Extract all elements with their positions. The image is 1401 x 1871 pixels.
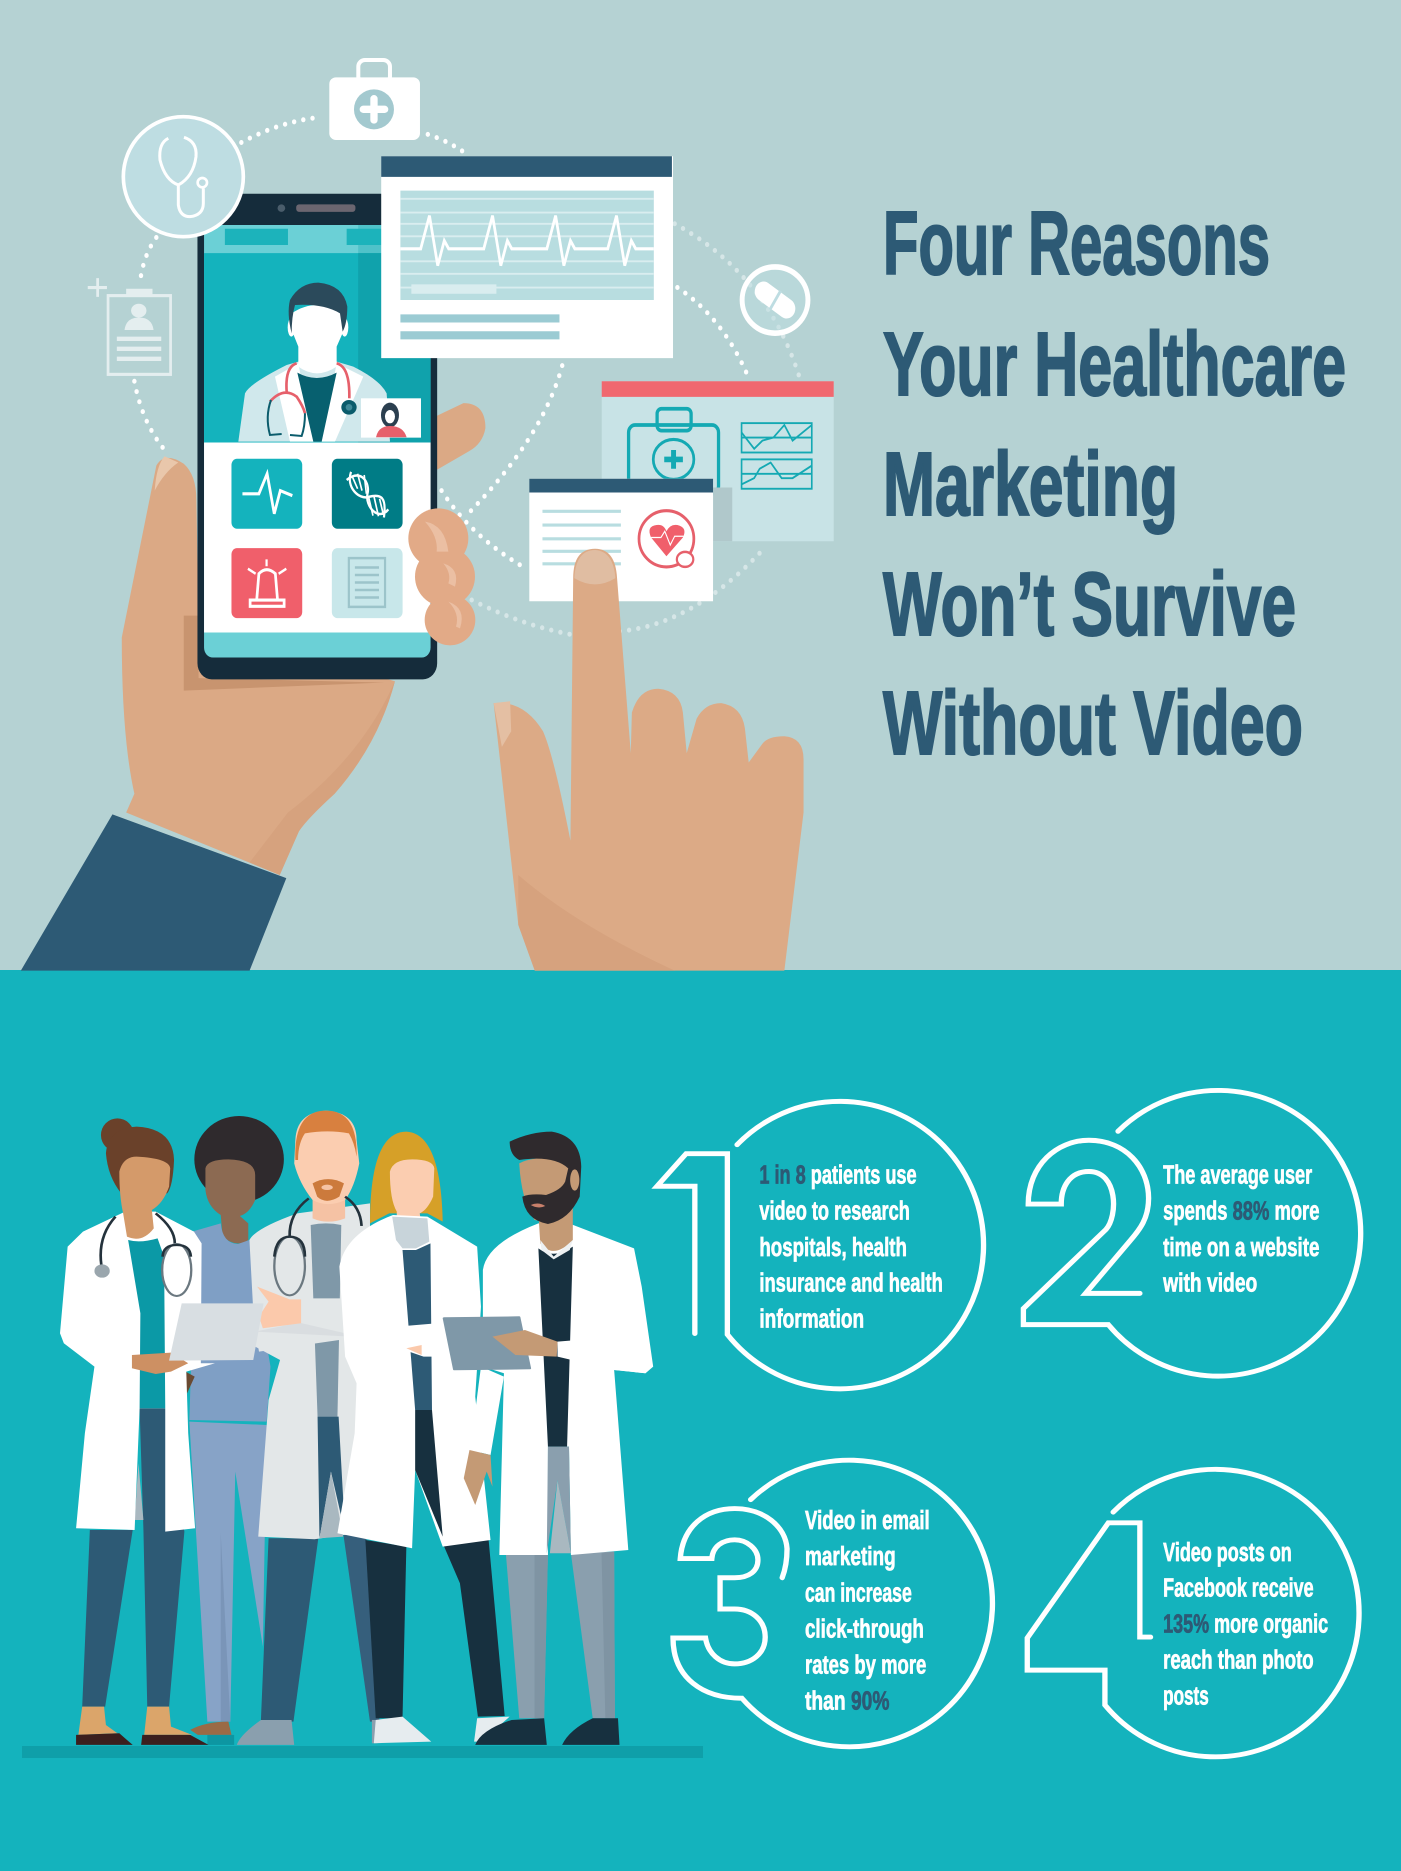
illustration: hands holding phone with medical icons <box>21 118 834 971</box>
stat 4 text: reach than photo <box>1163 1645 1314 1674</box>
stat 2 text: spends 88% more <box>1163 1197 1319 1225</box>
stat 1 text: video to research <box>759 1197 910 1225</box>
tile: document <box>332 548 403 618</box>
wrist shadow <box>250 681 395 875</box>
illustration: team of five doctors <box>60 1111 653 1745</box>
stat 3 text: than 90% <box>805 1686 889 1715</box>
doctor 2: blue scrubs <box>189 1116 284 1745</box>
tile: DNA <box>332 459 403 529</box>
stat 1: numeral and circle <box>657 1101 984 1389</box>
stat 4 text: Video posts on <box>1163 1538 1292 1567</box>
stat 3 text: Video in email <box>805 1506 930 1535</box>
title <box>883 194 1346 774</box>
stat 1 text: 1 in 8 patients use <box>759 1161 917 1189</box>
stat 3 text: click-through <box>805 1615 924 1643</box>
panel: heart card window <box>529 479 713 601</box>
stat 4 text <box>1163 1538 1328 1710</box>
stat 1 text <box>759 1161 943 1333</box>
stat 2 text: with video <box>1162 1269 1257 1297</box>
palm shadow <box>184 616 384 691</box>
panel: bottom teal background <box>0 970 1401 1871</box>
sleeve <box>21 814 286 971</box>
icon: clipboard with patient <box>88 278 171 374</box>
fingers over phone <box>408 508 475 645</box>
doctor 5: white coat, beard <box>464 1132 653 1745</box>
icon group: stethoscope and medical kit <box>123 60 420 237</box>
icon: pill badge <box>742 267 808 333</box>
panel: ECG monitor window <box>381 156 673 358</box>
panel: red header window <box>602 381 834 541</box>
crossed arm <box>255 1287 362 1352</box>
title: Marketing <box>883 435 1178 535</box>
icon: stethoscope badge <box>123 117 243 237</box>
stat 2 text: The average user <box>1163 1161 1312 1189</box>
stat 1 text: insurance and health <box>759 1269 943 1297</box>
stat 3 text: rates by more <box>805 1651 926 1679</box>
tile: alarm <box>231 548 302 618</box>
left hand back <box>122 458 395 875</box>
ground shadow <box>22 1746 703 1758</box>
hand and arm on tablet <box>492 1330 646 1373</box>
outlined stats group <box>657 1090 1361 1757</box>
stat 3 text: marketing <box>805 1542 896 1571</box>
stat 4 text: 135% more organic <box>1163 1610 1328 1638</box>
nail highlight <box>155 456 178 491</box>
stat 2 text: time on a website <box>1163 1233 1319 1262</box>
stat 4: numeral and circle <box>1027 1469 1359 1757</box>
doctor 1: white coat, bun <box>60 1118 215 1745</box>
stat 3 text <box>805 1506 930 1715</box>
doctor 4: blonde <box>337 1132 510 1743</box>
thumb behind phone <box>433 403 485 472</box>
phone <box>197 194 437 679</box>
stat 1 text: hospitals, health <box>759 1233 907 1262</box>
dotted connector arcs <box>134 118 800 634</box>
tablet <box>444 1317 530 1369</box>
stat 2: numeral and circle <box>1023 1090 1361 1376</box>
stat 4 text: Facebook receive <box>1163 1574 1314 1602</box>
doctor on phone screen <box>238 283 421 442</box>
tile: heartbeat <box>231 459 302 529</box>
laptop <box>169 1303 264 1361</box>
stat 1 text: information <box>759 1305 864 1333</box>
right hand pointing <box>494 549 804 971</box>
panel: top hero background <box>0 0 1401 971</box>
doctor 3: grey coat, red hair <box>237 1111 380 1745</box>
stat 4 text: posts <box>1163 1682 1209 1710</box>
stat 3: numeral and circle <box>673 1460 992 1747</box>
stat 2 text <box>1162 1161 1319 1297</box>
icon: medical kit <box>329 60 420 140</box>
stat 3 text: can increase <box>805 1578 912 1607</box>
